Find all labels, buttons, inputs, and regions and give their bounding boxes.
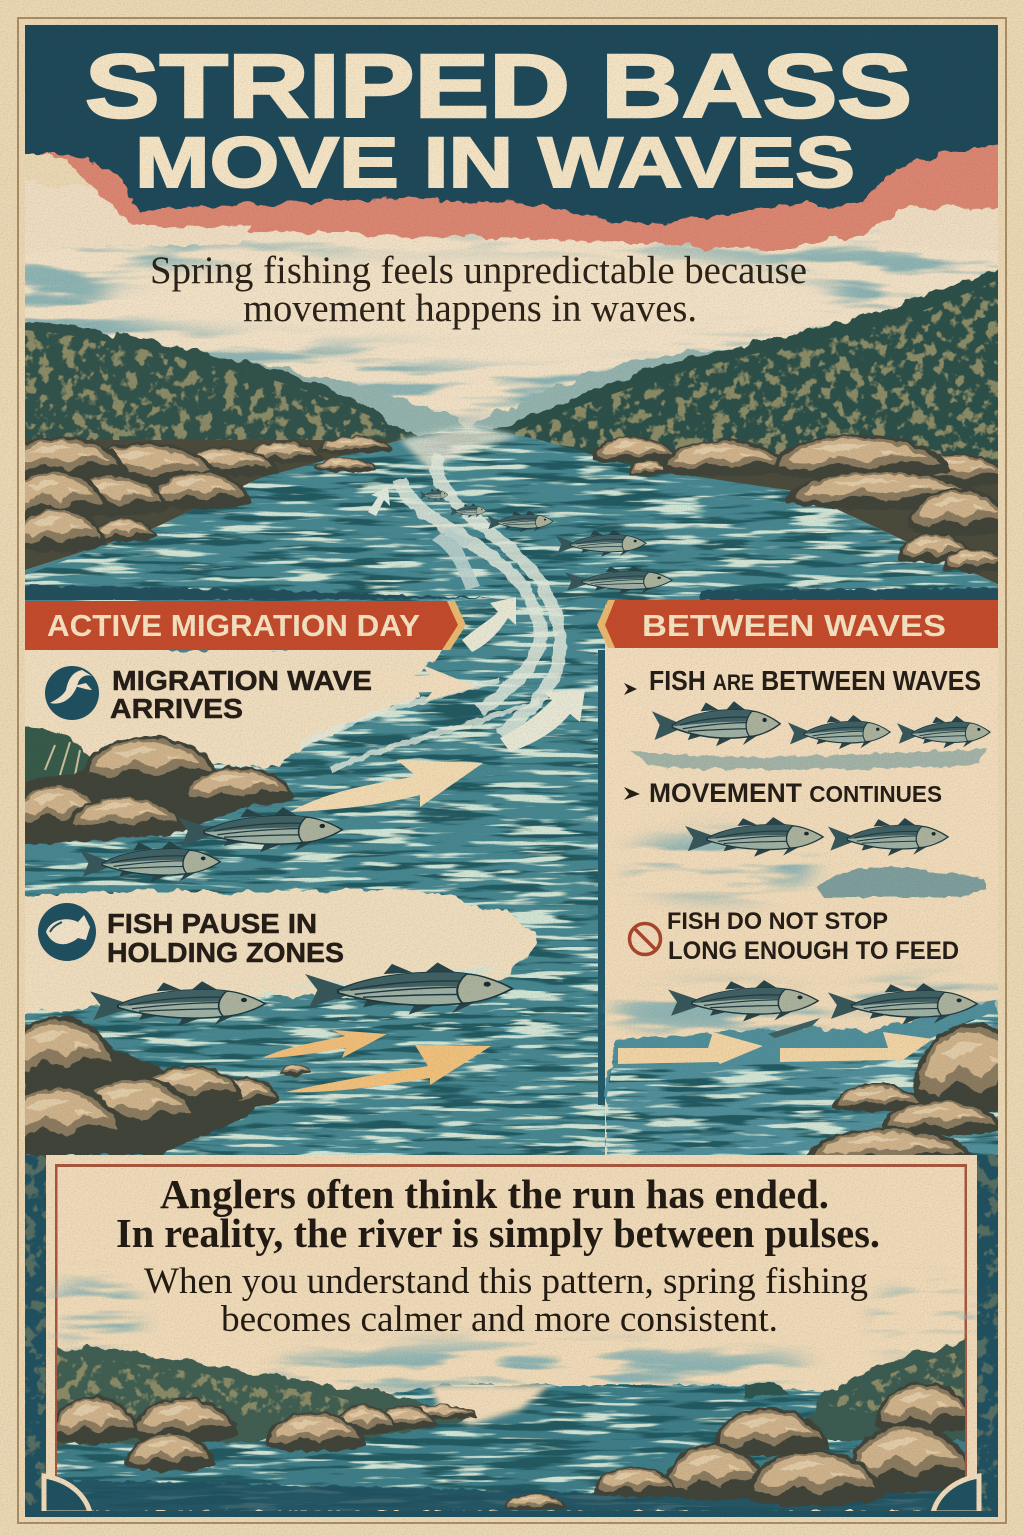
arrow: banner bend — [462, 597, 516, 652]
arrow: wave — [300, 664, 477, 701]
migration wave text — [45, 665, 372, 724]
rocks bottom right — [504, 1382, 976, 1510]
cream zone top — [10, 648, 445, 765]
arrow: gold upper — [262, 1030, 387, 1058]
list: between waves points — [624, 665, 981, 965]
active migration fish — [80, 807, 512, 1026]
landscape — [50, 1340, 976, 1511]
haze clouds — [50, 1280, 140, 1350]
rocks bottom left — [51, 1396, 478, 1472]
message text: becomes calmer and more consistent. — [221, 1299, 778, 1340]
holding zones text: FISH PAUSE IN — [107, 908, 317, 939]
river upper water — [10, 425, 1010, 605]
gold arrows lower left — [262, 1030, 491, 1092]
point: fish do not stop — [630, 908, 959, 965]
mist streaks — [630, 748, 985, 770]
point: fish do not stop: LONG ENOUGH TO FEED — [668, 937, 959, 965]
lower left rocks — [0, 1017, 311, 1155]
intro text: movement happens in waves. — [243, 287, 697, 330]
foliage left — [50, 1345, 470, 1445]
fish row 1 — [652, 701, 990, 749]
panel corner notches — [44, 1476, 979, 1513]
holding zones text — [38, 903, 344, 968]
title: MOVE IN WAVES — [135, 124, 855, 203]
banner: between waves: BETWEEN WAVES — [642, 608, 946, 643]
intro text: Spring fishing feels unpredictable because — [150, 249, 807, 292]
sky — [25, 221, 998, 426]
arrow: river bend — [432, 528, 480, 590]
water below — [606, 1000, 1010, 1165]
panel: between waves — [605, 648, 1024, 1168]
message text: When you understand this pattern, spring fishing — [144, 1261, 868, 1302]
migration wave text: MIGRATION WAVE — [112, 665, 372, 696]
icon: leaping fish — [45, 666, 99, 720]
bottom edge — [25, 1511, 998, 1517]
arrow: right of channel — [500, 690, 585, 752]
icon: no sign — [630, 924, 660, 954]
arrow: upstream small — [368, 487, 390, 516]
banner: active migration day: ACTIVE MIGRATION DAY — [47, 608, 420, 643]
bottom dark band — [25, 1155, 998, 1517]
panel: closing message — [46, 1155, 977, 1511]
foliage right — [800, 1340, 972, 1440]
arrow: gold right 2 — [780, 1032, 933, 1064]
dark channel edge — [598, 650, 605, 1105]
intro text — [150, 249, 807, 330]
title banner sky — [25, 25, 998, 252]
top river fish school — [420, 488, 672, 595]
icon: circling fish — [38, 903, 96, 961]
title — [85, 37, 912, 203]
banner: between waves — [597, 600, 998, 648]
message text — [116, 1171, 880, 1340]
message text: In reality, the river is simply between pulses. — [116, 1210, 880, 1256]
rocks right — [807, 1023, 1024, 1168]
point: movement continues: MOVEMENT CONTINUES — [649, 778, 942, 808]
title: STRIPED BASS — [85, 37, 912, 137]
inner rule — [55, 1164, 967, 1167]
arrow: gold lower — [285, 1045, 491, 1092]
white flow bands — [400, 455, 560, 735]
rocks upper banks — [0, 434, 1014, 572]
point: fish do not stop: FISH DO NOT STOP — [667, 908, 888, 935]
holding zones text: HOLDING ZONES — [107, 937, 344, 968]
right forest — [470, 265, 1010, 490]
message text: Anglers often think the run has ended. — [160, 1171, 829, 1217]
migration wave text: ARRIVES — [110, 693, 243, 724]
bank backing — [10, 440, 1010, 590]
salmon cloud band — [40, 144, 998, 252]
lower left water area — [10, 455, 606, 1155]
cream zone middle — [10, 888, 540, 1015]
arrow: cream — [290, 760, 483, 812]
cream cloud corners — [25, 180, 998, 252]
left forest — [10, 320, 420, 480]
fish row 2 — [685, 817, 948, 857]
point: fish are between waves: FISH ARE BETWEEN WAVES — [649, 665, 981, 696]
flow arrows in river — [290, 487, 585, 812]
distant hills — [240, 348, 729, 436]
navy title field — [25, 140, 998, 226]
water — [55, 1385, 967, 1511]
rock and bush group mid left — [10, 725, 295, 845]
river landscape scene — [25, 221, 998, 605]
banner: active migration day — [25, 601, 466, 650]
arrow: gold right 1 — [618, 1032, 763, 1064]
fish row 3 — [668, 980, 977, 1038]
